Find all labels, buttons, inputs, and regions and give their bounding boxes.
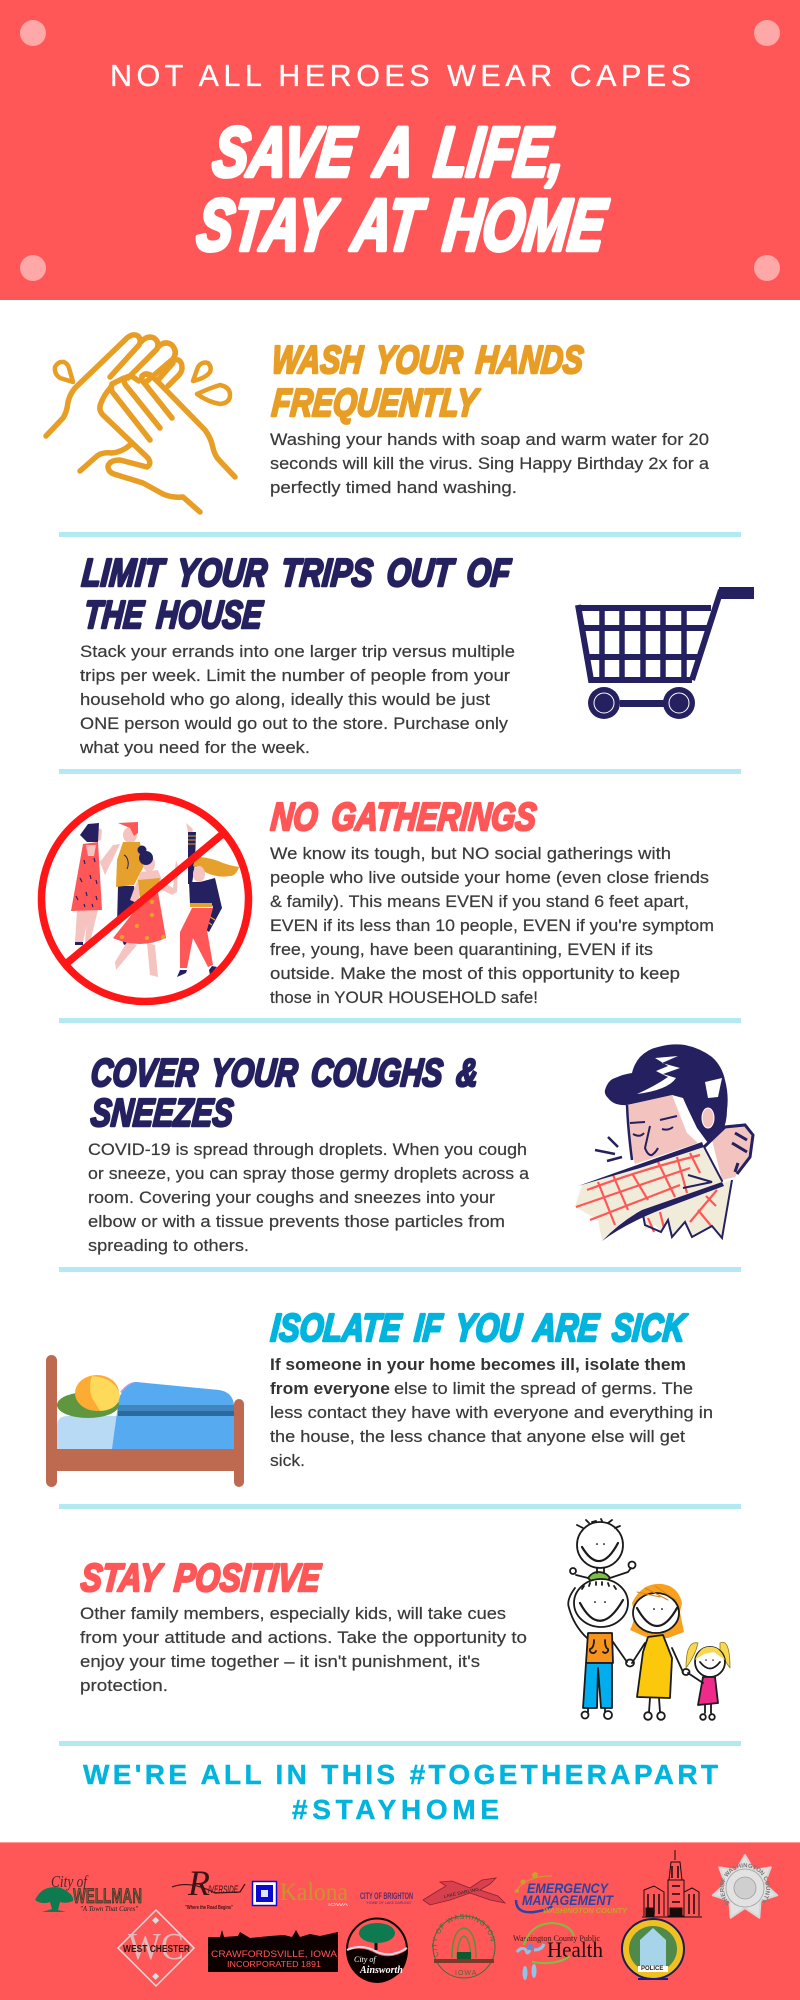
child on shoulders <box>570 1519 636 1582</box>
logo: Riverside <box>172 1863 245 1911</box>
mother <box>630 1584 684 1720</box>
panel: cover your coughs <box>88 1044 753 1255</box>
body text: from everyone <box>270 1380 390 1398</box>
body text <box>270 845 714 1007</box>
body text: & family). This means EVEN if you stand 6 feet apart, <box>270 893 689 911</box>
main title <box>193 112 612 266</box>
icon: stick-figure family <box>568 1519 730 1720</box>
panel: limit your trips <box>79 552 754 757</box>
logo: Crawfordsville, Iowa: INCORPORATED 1891 <box>227 1959 321 1969</box>
logo: city of Wellman: "A Town That Cares" <box>80 1905 138 1913</box>
logo: sheriff star badge: SHERIFF WASHINGTON COUNTY <box>720 1863 770 1905</box>
divider <box>59 1018 741 1023</box>
hair <box>605 1044 728 1143</box>
icon: man sneezing into elbow <box>575 1044 753 1241</box>
logo: city of Washington seal: CITY OF WASHINGTON <box>432 1914 496 1957</box>
main title: SAVE A LIFE, <box>209 112 570 191</box>
body text: from your attitude and actions. Take the opportunity to <box>80 1629 527 1647</box>
logo: City of Ainsworth: Ainsworth <box>359 1965 403 1976</box>
logo: West Chester: WEST CHESTER <box>123 1944 191 1955</box>
body text: trips per week. Limit the number of people from your <box>80 667 511 685</box>
logo: city of Wellman <box>35 1872 142 1913</box>
logo: Crawfordsville, Iowa <box>208 1930 338 1972</box>
logo: courthouse drawing <box>642 1850 702 1917</box>
icon: shopping cart <box>578 587 754 719</box>
heading: FREQUENTLY <box>270 382 481 425</box>
body text: else to limit the spread of germs. The <box>394 1380 693 1398</box>
logo: Washington police patch: POLICE <box>641 1966 663 1972</box>
body text <box>270 431 710 497</box>
closing hashtags: #STAYHOME <box>292 1794 499 1825</box>
main title: STAY AT HOME <box>193 184 612 266</box>
divider <box>59 1504 741 1509</box>
girl <box>682 1642 730 1720</box>
body text: enjoy your time together – it isn't punishment, it's <box>80 1653 480 1671</box>
body text: less contact they have with everyone and everything in <box>270 1404 713 1422</box>
body text: protection. <box>80 1677 168 1695</box>
icon: washing hands <box>46 335 235 512</box>
person 2 <box>116 822 144 945</box>
logo: Lake Darling <box>423 1878 505 1905</box>
logo: Lake Darling: LAKE DARLING <box>443 1886 480 1899</box>
cloth <box>643 1180 732 1238</box>
panel: isolate if you are sick <box>46 1307 713 1487</box>
logo: Washington County Public Health: Health <box>547 1937 603 1962</box>
logo: Kalona <box>252 1879 348 1907</box>
logo: Riverside: IVERSIDE <box>208 1884 238 1896</box>
panel: header banner <box>0 0 800 300</box>
body text: COVID-19 is spread through droplets. When you cough <box>88 1141 527 1159</box>
logo: Crawfordsville, Iowa: CRAWFORDSVILLE, IOWA <box>211 1949 337 1959</box>
person 4 <box>177 823 239 977</box>
body text: outside. Make the most of this opportunity to keep <box>270 965 680 983</box>
heading <box>270 339 585 425</box>
body text: what you need for the week. <box>79 739 310 757</box>
body text: or sneeze, you can spray those germy droplets across a <box>88 1165 530 1183</box>
panel: wash your hands <box>46 335 710 512</box>
logo: City of Brighton: CITY OF BRIGHTON <box>360 1891 413 1901</box>
body text: Other family members, especially kids, will take cues <box>80 1605 506 1623</box>
body text: We know its tough, but NO social gatherings with <box>270 845 671 863</box>
face <box>628 1095 698 1164</box>
kicker heading: NOT ALL HEROES WEAR CAPES <box>110 59 691 93</box>
logo: city of Washington seal <box>432 1914 496 1978</box>
divider <box>59 769 741 774</box>
body text: Washing your hands with soap and warm water for 20 <box>270 431 709 449</box>
body text: If someone in your home becomes ill, isolate them <box>270 1356 686 1374</box>
icon: prohibited gathering <box>42 796 248 1002</box>
father <box>568 1579 634 1719</box>
body text: spreading to others. <box>88 1237 249 1255</box>
heading: NO GATHERINGS <box>269 796 538 839</box>
body text: household who go along, ideally this would be just <box>80 691 490 709</box>
closing hashtags <box>83 1759 718 1825</box>
logo: West Chester <box>118 1910 194 1986</box>
logo: city of Wellman: WELLMAN <box>73 1885 142 1908</box>
logo: Emergency Management: WASHINGTON COUNTY <box>543 1908 628 1915</box>
body text: seconds will kill the virus. Sing Happy Birthday 2x for a <box>270 455 710 473</box>
logo: Emergency Management: EMERGENCY <box>527 1880 609 1896</box>
closing hashtags: WE'RE ALL IN THIS #TOGETHERAPART <box>83 1759 718 1790</box>
logo: sheriff star badge <box>712 1854 778 1919</box>
logo: Washington County Public Health: Washington County Public <box>513 1934 600 1943</box>
heading: STAY POSITIVE <box>79 1557 324 1600</box>
heading: SNEEZES <box>89 1092 235 1135</box>
heading: THE HOUSE <box>82 594 265 637</box>
body text <box>80 1605 527 1695</box>
heading: COVER YOUR COUGHS & <box>89 1052 480 1095</box>
heading <box>89 1052 480 1135</box>
icon: person in bed <box>46 1355 244 1487</box>
logo: West Chester: WC <box>128 1926 184 1968</box>
logo: city of Washington seal: IOWA <box>455 1970 477 1977</box>
body text: perfectly timed hand washing. <box>270 479 517 497</box>
person 1 <box>71 823 120 945</box>
person 3 <box>113 846 178 977</box>
panel: no gatherings <box>42 796 714 1007</box>
logo: City of Ainsworth: City of <box>354 1955 377 1964</box>
heading: LIMIT YOUR TRIPS OUT OF <box>80 552 513 595</box>
logo: city of Wellman: City of <box>51 1872 89 1891</box>
heading <box>80 552 513 637</box>
divider <box>59 1741 741 1746</box>
panel: stay positive <box>79 1519 730 1720</box>
logo: Kalona: Kalona <box>280 1879 348 1906</box>
logo: Washington police patch <box>622 1919 684 1980</box>
logo: Emergency Management <box>515 1872 628 1915</box>
body text <box>79 643 515 757</box>
body text: sick. <box>270 1452 305 1470</box>
logo: Riverside: "Where the Road Begins" <box>185 1905 233 1911</box>
body text: elbow or with a tissue prevents those particles from <box>88 1213 505 1231</box>
divider <box>59 532 741 537</box>
body text: room. Covering your coughs and sneezes into your <box>88 1189 496 1207</box>
body text <box>270 1356 713 1470</box>
body text <box>88 1141 530 1255</box>
heading: WASH YOUR HANDS <box>270 339 585 382</box>
heading: ISOLATE IF YOU ARE SICK <box>269 1307 689 1350</box>
logo: Kalona: IOWA <box>328 1902 348 1907</box>
body text: EVEN if its less than 10 people, EVEN if you're symptom <box>270 917 714 935</box>
corner dots <box>20 20 780 281</box>
body text: the house, the less chance that anyone else will get <box>270 1428 685 1446</box>
eyes and nose <box>630 1116 677 1155</box>
sneeze marks <box>595 1137 622 1161</box>
body text: those in YOUR HOUSEHOLD safe! <box>270 989 538 1007</box>
logo: City of Brighton <box>360 1891 413 1905</box>
body text: Stack your errands into one larger trip versus multiple <box>80 643 515 661</box>
logo: City of Brighton: "HOME OF LAKE DARLING" <box>366 1900 413 1905</box>
body text: ONE person would go out to the store. Purchase only <box>80 715 509 733</box>
logo: Riverside: R <box>187 1863 210 1903</box>
body text: people who live outside your home (even close friends <box>270 869 709 887</box>
logo: Emergency Management: MANAGEMENT <box>522 1892 614 1908</box>
panel: footer partner logos <box>0 1842 800 2000</box>
hand <box>712 1125 752 1180</box>
divider <box>59 1267 741 1272</box>
logo: Washington County Public Health <box>513 1923 603 1980</box>
body text: free, young, have been quarantining, EVEN if its <box>270 941 653 959</box>
logo: City of Ainsworth <box>347 1918 407 1983</box>
